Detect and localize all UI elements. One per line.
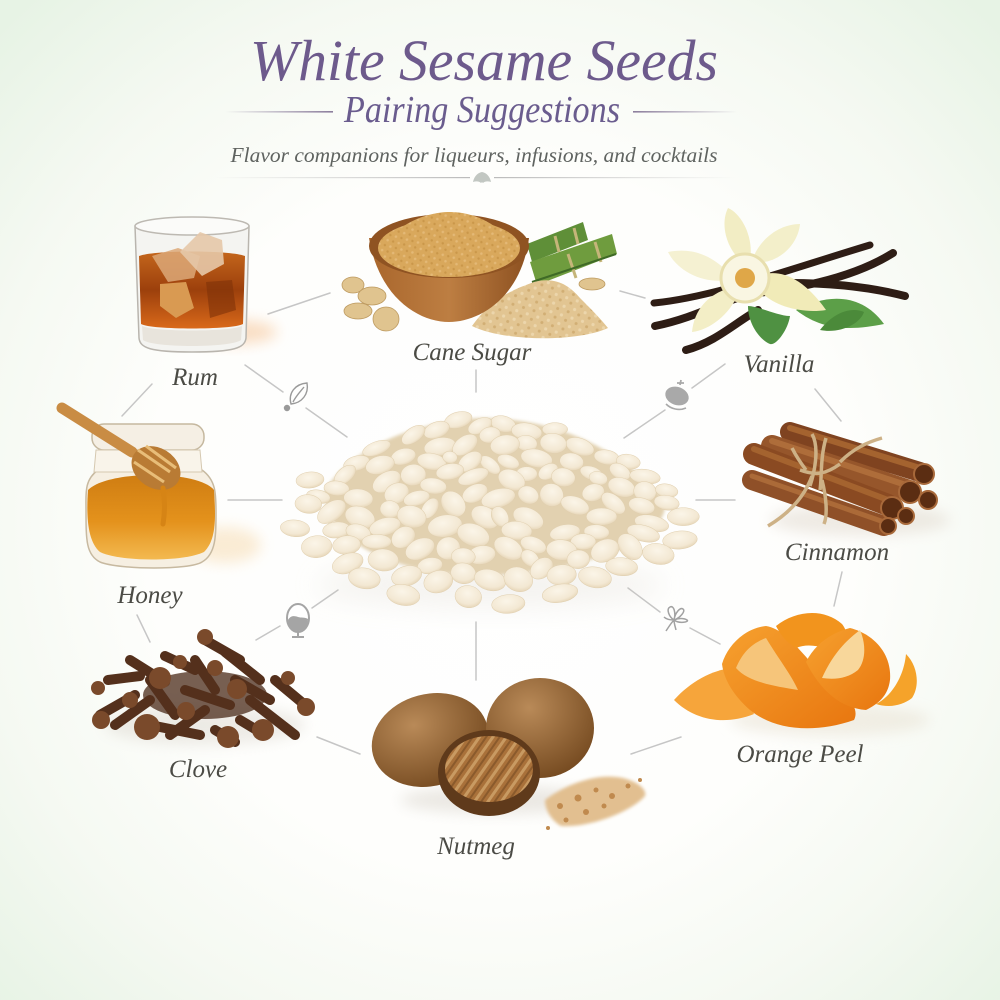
label: Cinnamon: Cinnamon [785, 539, 889, 566]
label: Nutmeg: Nutmeg [436, 833, 515, 860]
label: Vanilla: Vanilla [744, 351, 814, 378]
label: Orange Peel: Orange Peel [736, 741, 864, 768]
illustration: rum glass [135, 217, 277, 352]
sesame seed pile [280, 409, 699, 615]
icon: covered plate [663, 380, 691, 409]
icon: wine glass [287, 604, 309, 637]
petals [724, 208, 751, 262]
labels [116, 339, 889, 860]
label: Clove: Clove [169, 756, 227, 783]
label: Honey: Honey [116, 582, 184, 609]
icon: ribbon [664, 607, 688, 631]
tagline: Flavor companions for liqueurs, infusions, and cocktails [229, 143, 717, 167]
header [215, 28, 737, 183]
illustration: nutmeg [361, 678, 645, 830]
illustration: vanilla [654, 208, 905, 350]
subtitle: Pairing Suggestions [343, 89, 620, 131]
illustration: orange peel [674, 613, 930, 736]
title: White Sesame Seeds [250, 28, 718, 93]
ornament [473, 172, 491, 183]
connector lines [122, 291, 842, 754]
label: Rum: Rum [171, 364, 218, 391]
illustration: cloves [91, 629, 315, 748]
icon: leaf [284, 383, 307, 410]
illustration: cinnamon [752, 428, 950, 536]
illustration: honey jar [62, 408, 261, 568]
illustration: cane sugar [342, 212, 617, 338]
label: Cane Sugar: Cane Sugar [413, 339, 532, 366]
crumbs [545, 777, 645, 830]
leaves [748, 306, 790, 344]
